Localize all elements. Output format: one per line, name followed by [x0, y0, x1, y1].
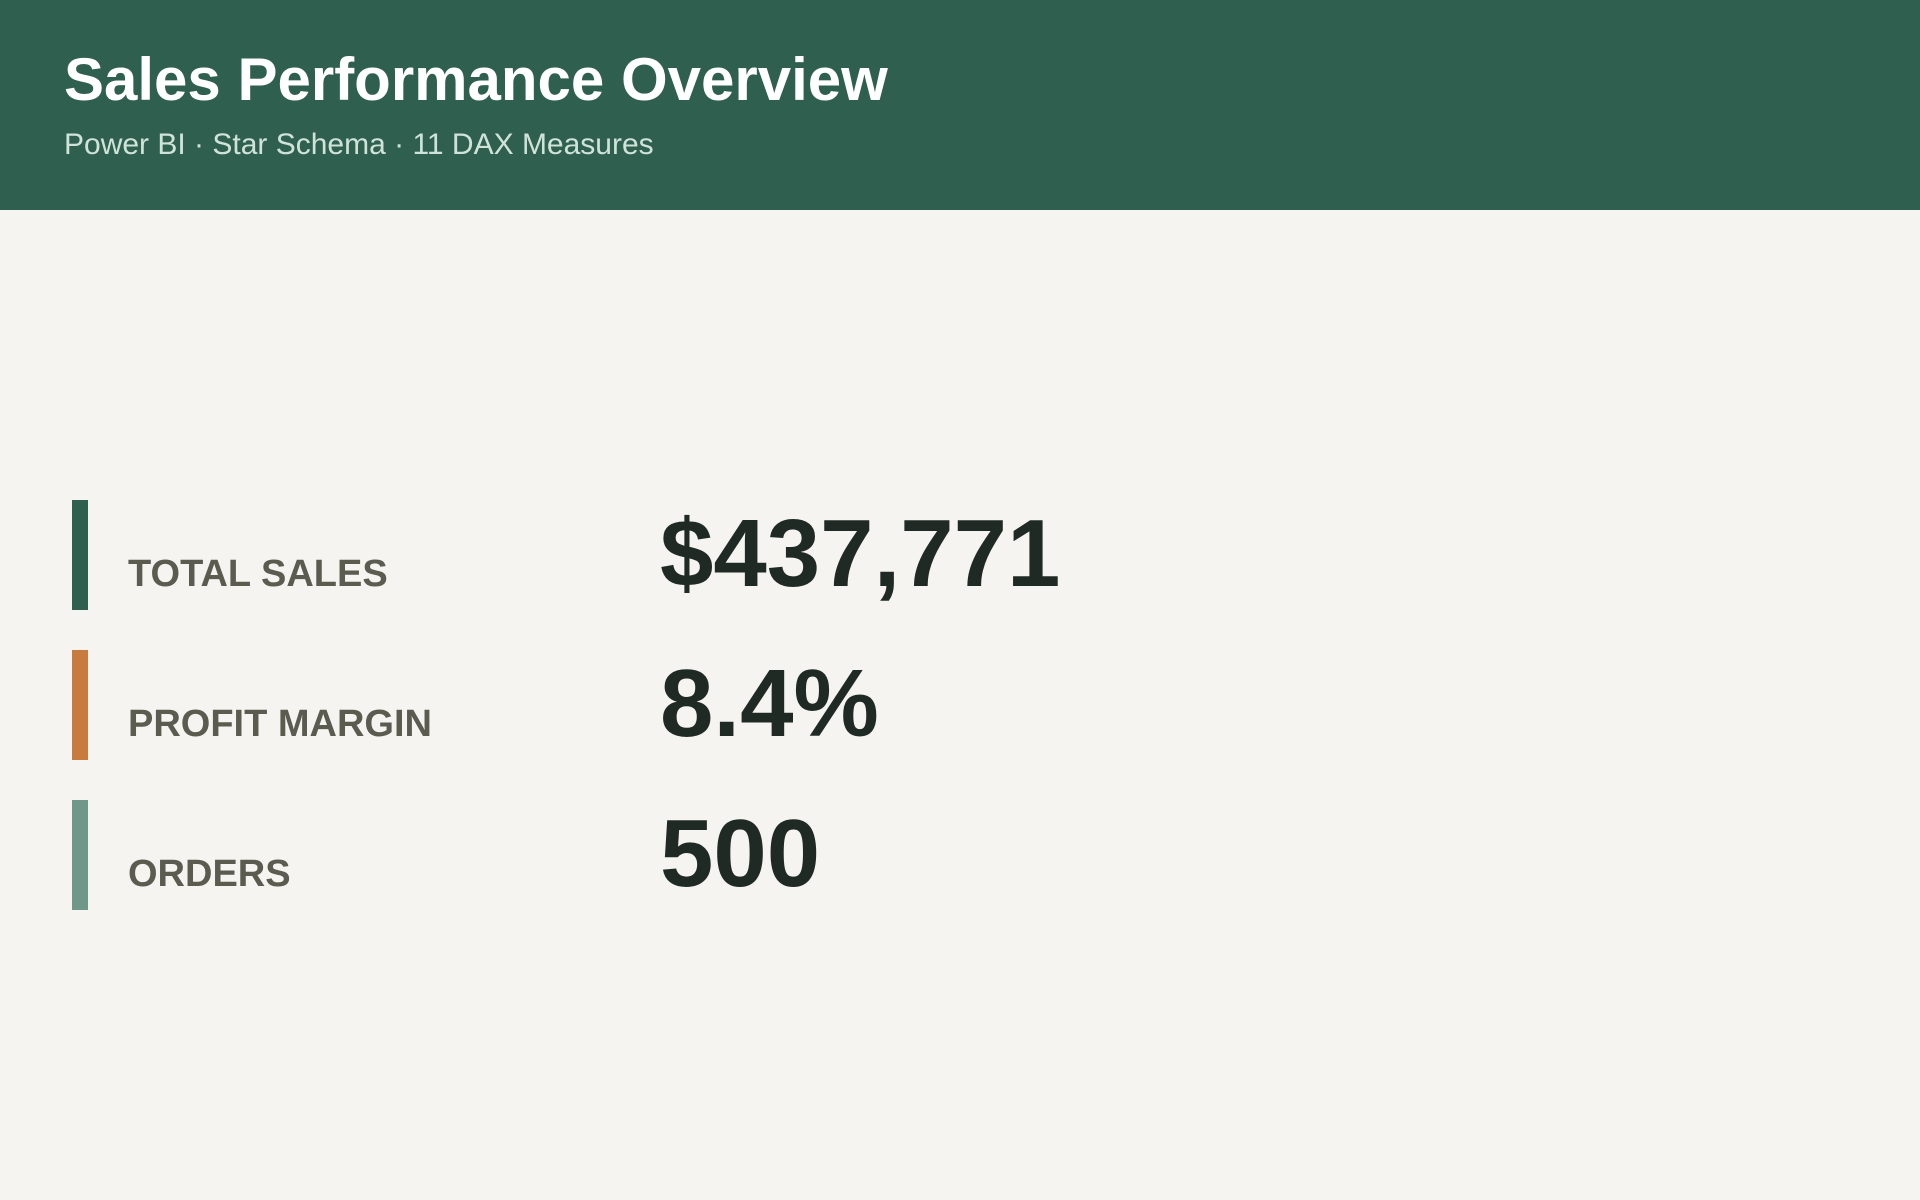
KPI row: total sales: $437,771	[660, 500, 1060, 607]
KPI row: orders: 500	[660, 800, 820, 907]
KPI row: orders: ORDERS	[128, 853, 291, 895]
KPI row: total sales	[72, 500, 1060, 610]
KPI row: profit margin: 8.4%	[660, 650, 879, 757]
KPI row: profit margin	[72, 650, 879, 760]
header band	[0, 0, 1920, 210]
KPI row: total sales: TOTAL SALES	[128, 553, 388, 595]
title: Sales Performance Overview	[64, 46, 888, 113]
subtitle: Power BI · Star Schema · 11 DAX Measures	[64, 128, 654, 161]
KPI row: orders	[72, 800, 820, 910]
KPI row: profit margin: PROFIT MARGIN	[128, 703, 432, 745]
